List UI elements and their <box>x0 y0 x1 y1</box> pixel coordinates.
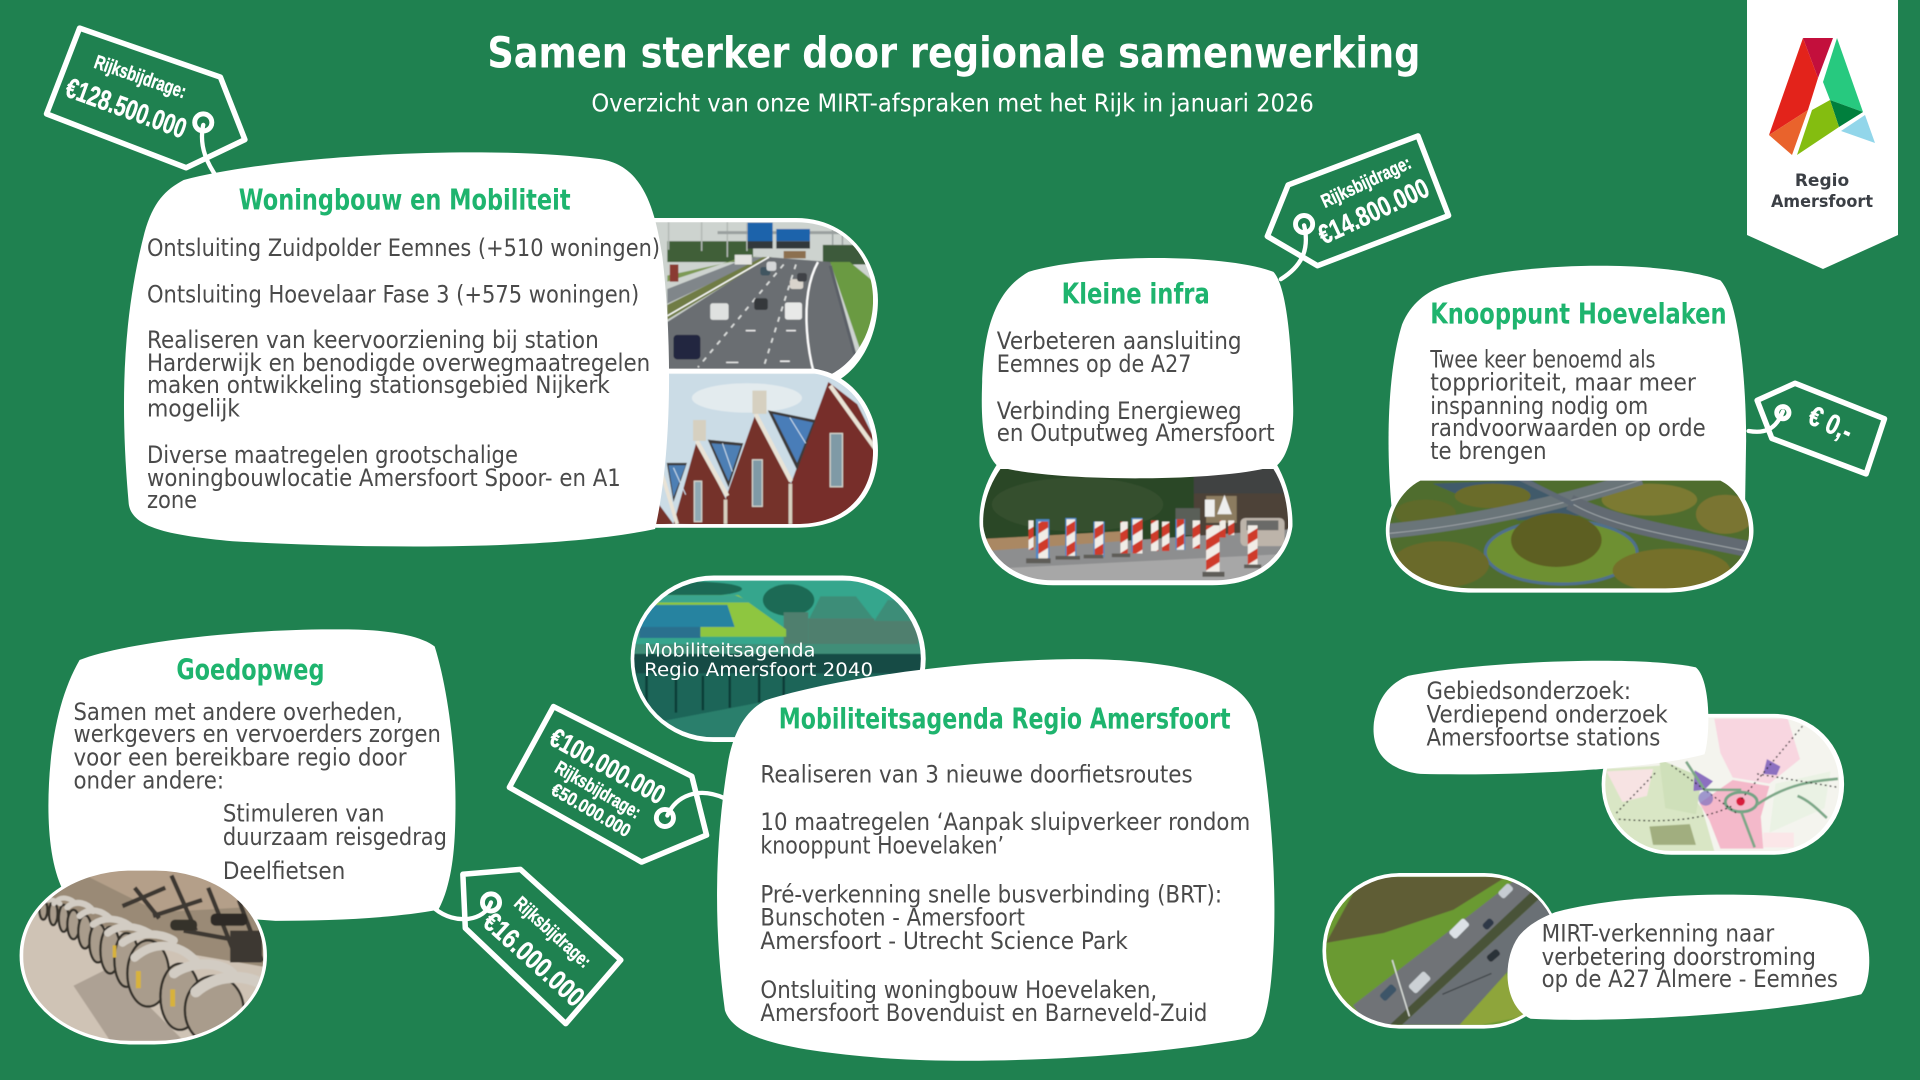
connector: string tag Knooppunt <box>1749 411 1783 432</box>
body: Deelfietsen <box>223 857 345 885</box>
list: zone <box>147 486 197 514</box>
body: Samen met andere overheden, <box>73 698 403 726</box>
title: Samen sterker door regionale samenwerking <box>487 28 1420 78</box>
price tag: € 0,-: € 0,- <box>1804 400 1858 447</box>
connector: string tag Goedopweg <box>435 902 491 919</box>
list: Pré-verkenning snelle busverbinding (BRT): <box>760 880 1222 908</box>
body: randvoorwaarden op orde <box>1430 414 1706 442</box>
caption <box>644 639 873 681</box>
body: te brengen <box>1430 437 1547 465</box>
price tag: 16.000.000 <box>463 869 621 1024</box>
heading: Mobiliteitsagenda Regio Amersfoort <box>779 703 1231 736</box>
panel: Goedopweg <box>48 629 456 921</box>
list: Realiseren van keervoorziening bij station <box>147 326 599 354</box>
body: verbetering doorstroming <box>1542 943 1816 971</box>
panel: Woningbouw en Mobiliteit <box>124 152 669 546</box>
list: 10 maatregelen ‘Aanpak sluipverkeer rondom <box>760 808 1250 836</box>
connector: string tag Kleine infra <box>1281 225 1306 279</box>
photo: rental bicycles <box>20 867 267 1044</box>
body: Eemnes op de A27 <box>997 350 1191 378</box>
body: werkgevers en vervoerders zorgen <box>73 720 441 748</box>
list: Ontsluiting Zuidpolder Eemnes (+510 woningen) <box>147 234 660 262</box>
photo: train with caption <box>631 576 926 742</box>
list: Harderwijk en benodigde overwegmaatregelen <box>147 349 650 377</box>
body: Stimuleren van <box>223 800 384 828</box>
body <box>997 327 1275 447</box>
list: Amersfoort Bovenduist en Barneveld-Zuid <box>760 999 1207 1027</box>
photo: area map <box>1602 714 1844 855</box>
price tag: 100.000.000 / 50.000.000: €100.000.000 <box>544 722 670 810</box>
panel: Gebiedsonderzoek <box>1374 661 1708 774</box>
price tag: 128.500.000: Rijksbijdrage: <box>91 51 189 103</box>
body <box>73 698 447 885</box>
logo: Regio Amersfoort banner <box>1747 0 1898 269</box>
body: Verbinding Energieweg <box>997 397 1242 425</box>
body: inspanning nodig om <box>1430 392 1648 420</box>
logo: Regio Amersfoort banner: Regio <box>1795 171 1849 191</box>
body: Twee keer benoemd als <box>1429 345 1656 373</box>
heading: Woningbouw en Mobiliteit <box>239 183 571 216</box>
panel: Mobiliteitsagenda Regio Amersfoort <box>717 659 1274 1061</box>
photo: highway with gantry signs <box>654 218 878 378</box>
body: voor een bereikbare regio door <box>73 743 407 771</box>
price tag: 128.500.000: €128.500.000 <box>62 72 191 144</box>
price tag: 14.800.000: Rijksbijdrage: <box>1318 153 1415 213</box>
list: Diverse maatregelen grootschalige <box>147 441 518 469</box>
body <box>1542 920 1838 993</box>
list: Bunschoten - Amersfoort <box>760 904 1025 932</box>
price tag: € 0,- <box>1757 383 1884 474</box>
list <box>147 234 660 514</box>
heading: Goedopweg <box>176 654 324 687</box>
heading: Kleine infra <box>1062 278 1210 311</box>
price tag: 16.000.000: €16.000.000 <box>477 906 591 1013</box>
photo: road barriers <box>979 463 1296 588</box>
panel: Kleine infra <box>982 258 1293 478</box>
caption: Regio Amersfoort 2040 <box>644 659 873 681</box>
price tag: 100.000.000 / 50.000.000: €50.000.000 <box>548 779 635 841</box>
list: knooppunt Hoevelaken’ <box>760 831 1004 859</box>
body <box>1427 677 1668 752</box>
list <box>760 760 1250 1027</box>
panel: MIRT-verkenning <box>1507 895 1869 1020</box>
subtitle: Overzicht van onze MIRT-afspraken met het Rijk in januari 2026 <box>591 88 1314 117</box>
photo: houses with solar panels <box>655 368 878 528</box>
list: Ontsluiting Hoevelaar Fase 3 (+575 woningen) <box>147 280 639 308</box>
list: woningbouwlocatie Amersfoort Spoor- en A1 <box>147 464 621 492</box>
photo: A27 aerial <box>1322 873 1561 1029</box>
body: en Outputweg Amersfoort <box>997 419 1275 447</box>
caption: Mobiliteitsagenda <box>644 639 816 661</box>
body: onder andere: <box>73 767 224 795</box>
price tag: 14.800.000 <box>1267 136 1449 266</box>
heading: Knooppunt Hoevelaken <box>1430 297 1727 330</box>
panel: Knooppunt Hoevelaken <box>1389 266 1746 514</box>
price tag: 16.000.000: Rijksbijdrage: <box>510 893 595 973</box>
list: mogelijk <box>147 394 240 422</box>
logo: Regio Amersfoort banner: Amersfoort <box>1771 192 1873 212</box>
body: Verbeteren aansluiting <box>997 327 1242 355</box>
price tag: 100.000.000 / 50.000.000 <box>509 707 707 862</box>
price tag: 100.000.000 / 50.000.000: Rijksbijdrage: <box>551 758 644 824</box>
connector: string tag Mobiliteitsagenda <box>667 793 725 816</box>
body: Verdiepend onderzoek <box>1427 700 1668 728</box>
photo: Knooppunt interchange <box>1384 476 1757 594</box>
body: Gebiedsonderzoek: <box>1427 677 1631 705</box>
body <box>1429 345 1706 465</box>
body: op de A27 Almere - Eemnes <box>1542 965 1838 993</box>
price tag: 128.500.000 <box>47 28 245 168</box>
list: Realiseren van 3 nieuwe doorfietsroutes <box>760 760 1193 788</box>
body: MIRT-verkenning naar <box>1542 920 1774 948</box>
list: Amersfoort - Utrecht Science Park <box>760 927 1128 955</box>
body: Amersfoortse stations <box>1427 724 1660 752</box>
connector: string tag Woningbouw <box>202 125 218 179</box>
price tag: 14.800.000: €14.800.000 <box>1313 172 1434 250</box>
list: maken ontwikkeling stationsgebied Nijkerk <box>147 371 610 399</box>
body: topprioriteit, maar meer <box>1430 369 1696 397</box>
body: duurzaam reisgedrag <box>223 823 447 851</box>
list: Ontsluiting woningbouw Hoevelaken, <box>760 976 1157 1004</box>
